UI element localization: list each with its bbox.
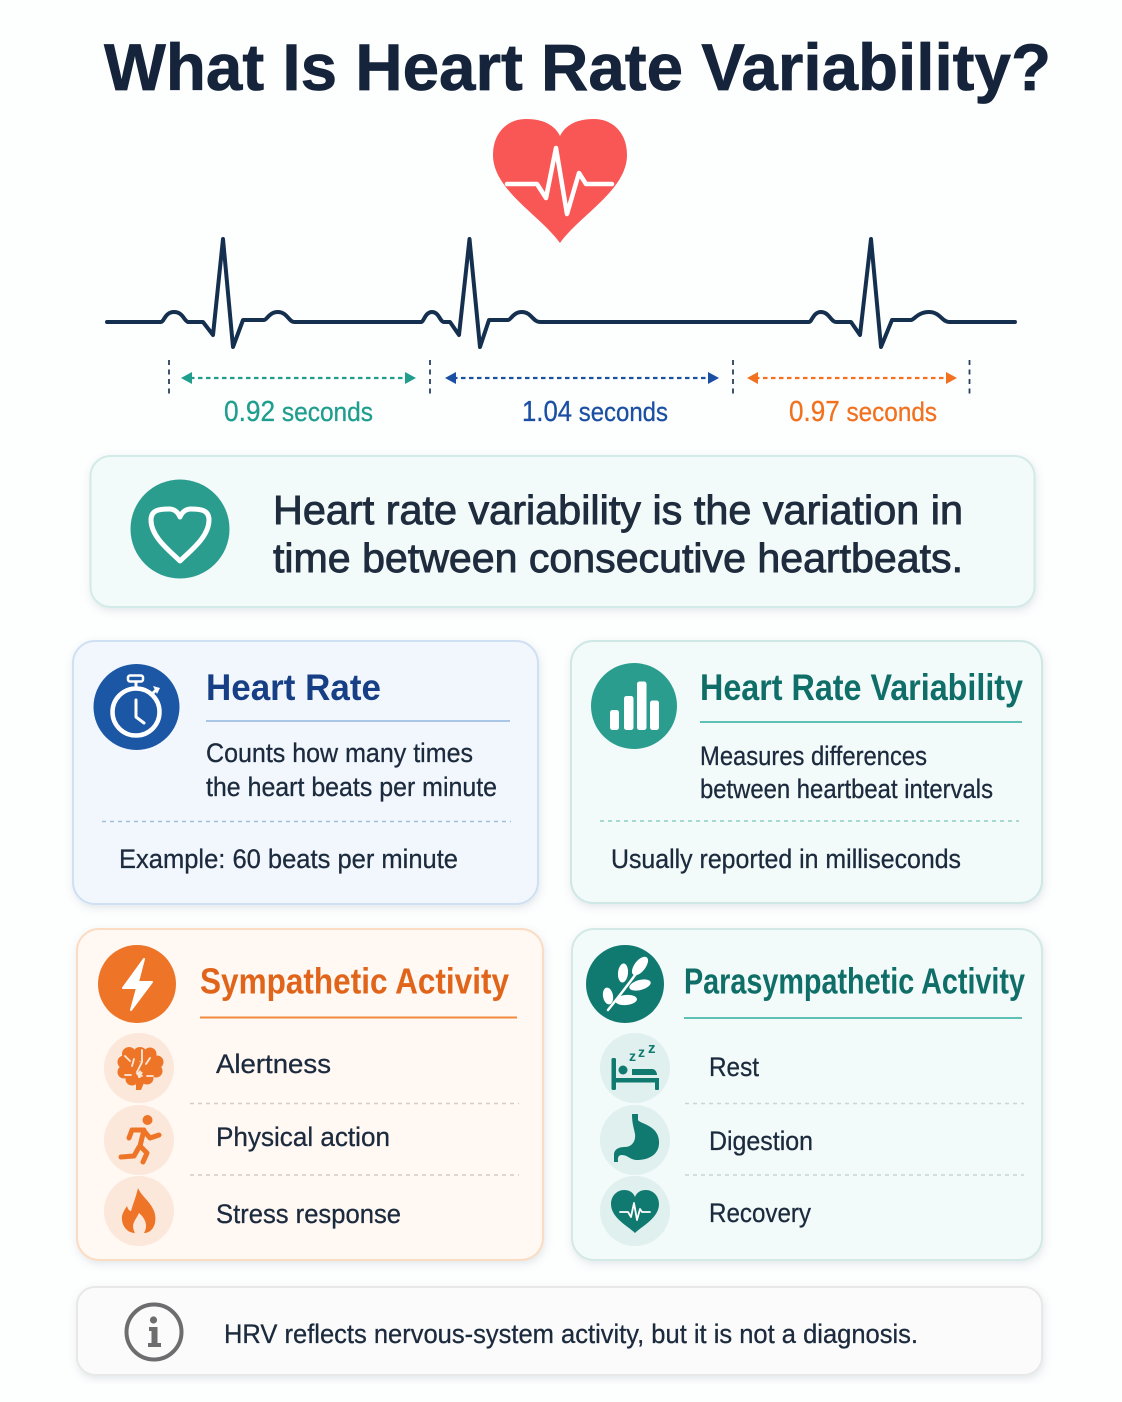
- icon: flame: [104, 1176, 174, 1246]
- heading: Parasympathetic Activity: [684, 960, 1025, 1002]
- arrow: interval 3: [747, 372, 957, 384]
- panel: sympathetic activity: [77, 929, 543, 1260]
- heading: Heart Rate Variability: [700, 667, 1023, 708]
- example: Example: 60 beats per minute: [119, 844, 458, 874]
- item: rest: Rest: [709, 1052, 759, 1082]
- panel: parasympathetic activity: [572, 929, 1042, 1260]
- definition text: Heart rate variability is the variation in: [273, 487, 963, 533]
- arrow: interval 2: [445, 372, 719, 384]
- icon: bars: [591, 663, 677, 749]
- item: alertness: Alertness: [216, 1049, 331, 1079]
- item: stress response: Stress response: [216, 1199, 401, 1229]
- icon: lightning bolt: [98, 945, 176, 1023]
- interval 1 label: 0.92 seconds: [224, 396, 373, 428]
- icon: bed: [600, 1033, 670, 1103]
- icon: leafy branch: [586, 945, 664, 1023]
- interval 2 label: 1.04 seconds: [522, 396, 668, 428]
- units note: Usually reported in milliseconds: [611, 844, 961, 874]
- icon: runner: [104, 1105, 174, 1175]
- icon: stopwatch: [94, 664, 180, 750]
- icon: bed: z: [638, 1044, 645, 1060]
- icon: heart outline: [130, 480, 230, 578]
- description: Counts how many times: [206, 738, 473, 768]
- heading: Sympathetic Activity: [200, 960, 509, 1002]
- panel: heart rate: [73, 641, 538, 904]
- icon: stomach: [600, 1105, 670, 1175]
- panel: heart rate variability: [571, 641, 1042, 903]
- item: recovery: Recovery: [709, 1198, 811, 1228]
- interval ticks: [169, 360, 970, 397]
- item: digestion: Digestion: [709, 1126, 813, 1156]
- description: between heartbeat intervals: [700, 774, 993, 804]
- item: physical action: Physical action: [216, 1122, 390, 1152]
- definition text: time between consecutive heartbeats.: [273, 535, 963, 581]
- heading: Heart Rate: [206, 667, 381, 708]
- panel: disclaimer: [77, 1287, 1042, 1375]
- ECG trace: [107, 239, 1015, 347]
- icon: bed: z: [648, 1040, 656, 1057]
- icon: heart with pulse small: [600, 1176, 670, 1246]
- disclaimer text: HRV reflects nervous-system activity, but it is not a diagnosis.: [224, 1319, 918, 1349]
- description: the heart beats per minute: [206, 772, 497, 802]
- callout: definition: [90, 456, 1034, 607]
- icon: bed: z: [629, 1048, 636, 1064]
- icon: brain: [104, 1033, 174, 1103]
- description: Measures differences: [700, 741, 927, 771]
- title: What Is Heart Rate Variability?: [104, 30, 1051, 104]
- icon: heart with pulse: [493, 119, 627, 243]
- interval 3 label: 0.97 seconds: [789, 396, 937, 428]
- icon: info: [126, 1304, 182, 1360]
- arrow: interval 1: [181, 372, 416, 384]
